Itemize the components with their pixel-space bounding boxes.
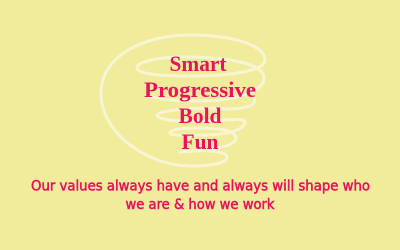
value: Progressive: Progressive [144,77,256,102]
value: Fun: Fun [182,129,219,154]
title: values list [144,51,256,154]
caption line 2: we are & how we work [126,197,275,213]
icon: spiral tornado [101,35,265,166]
value: Smart: Smart [170,51,227,76]
value: Bold: Bold [178,103,222,128]
caption line 1: Our values always have and always will shape who [31,178,370,194]
caption: values statement [31,178,370,213]
